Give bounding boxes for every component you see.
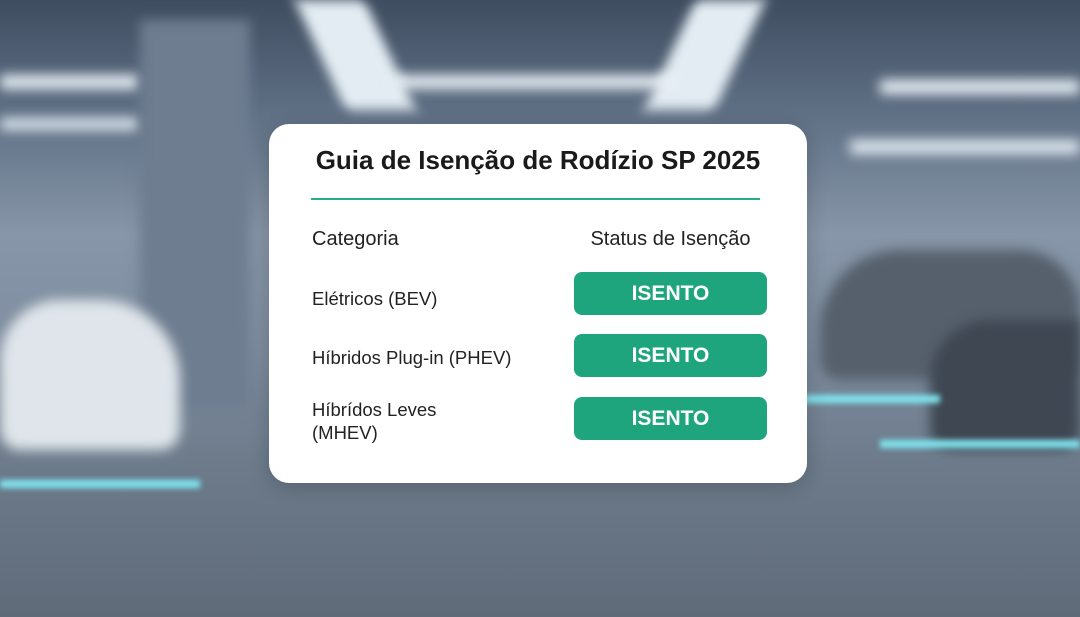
card: exemption table xyxy=(269,124,807,483)
row: BEV badge: ISENTO xyxy=(632,282,709,305)
row: MHEV badge: ISENTO xyxy=(632,407,709,430)
row: PHEV badge: ISENTO xyxy=(632,344,709,367)
row: MHEV label xyxy=(312,399,436,443)
row: PHEV label: Híbridos Plug-in (PHEV) xyxy=(312,347,511,368)
title: Guia de Isenção de Rodízio SP 2025 xyxy=(316,145,760,175)
row: MHEV badge xyxy=(574,397,767,440)
row: BEV badge xyxy=(574,272,767,315)
row: MHEV label: (MHEV) xyxy=(312,422,378,443)
divider line xyxy=(311,198,760,200)
row: PHEV badge xyxy=(574,334,767,377)
row: BEV label: Elétricos (BEV) xyxy=(312,288,437,309)
row: MHEV label: Híbrídos Leves xyxy=(312,399,436,420)
header: status: Status de Isenção xyxy=(590,228,751,250)
header: categoria: Categoria xyxy=(312,228,399,250)
